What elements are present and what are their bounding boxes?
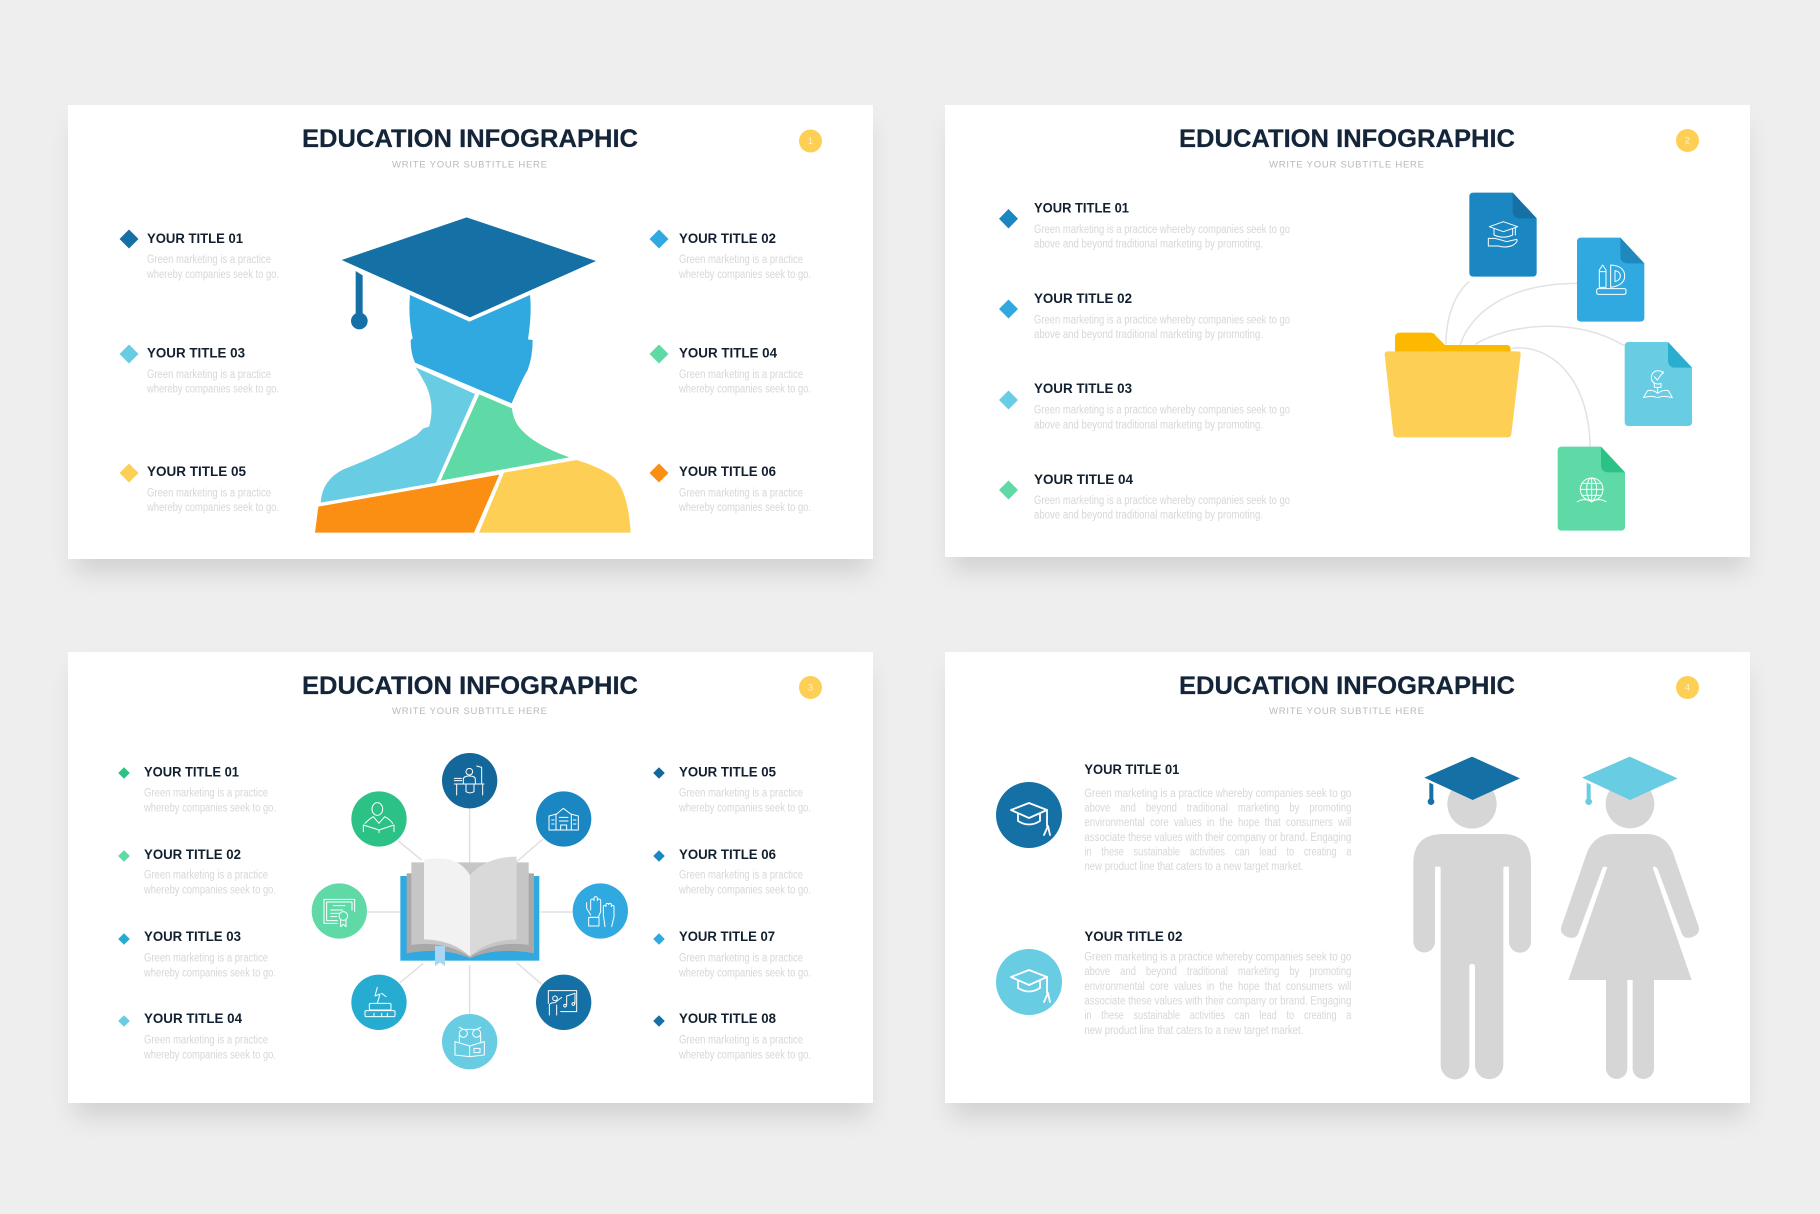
page number badge: 1 [808, 136, 813, 146]
item: title 06 [653, 847, 811, 896]
node: owl reading book [442, 1014, 497, 1069]
item: title 04: Green marketing is a practice [144, 1034, 268, 1046]
node: raised hands [573, 883, 628, 939]
item: title 02 [999, 291, 1290, 341]
item: title 02 [650, 230, 811, 281]
item: title 04: whereby companies seek to go. [678, 384, 811, 396]
item: title 07: YOUR TITLE 07 [679, 929, 775, 944]
item: title 06: whereby companies seek to go. [678, 502, 811, 514]
item: title 02: whereby companies seek to go. [143, 884, 276, 896]
item: title 05: whereby companies seek to go. [146, 502, 279, 514]
left neck segment [321, 367, 475, 503]
subtitle: WRITE YOUR SUBTITLE HERE [1269, 160, 1424, 170]
item: title 06: YOUR TITLE 06 [679, 464, 776, 479]
item: title 07: Green marketing is a practice [679, 952, 803, 964]
subtitle: WRITE YOUR SUBTITLE HERE [392, 706, 547, 717]
item: title 01 [999, 201, 1290, 251]
item: title 08: Green marketing is a practice [679, 1034, 803, 1046]
subtitle: WRITE YOUR SUBTITLE HERE [1269, 706, 1424, 717]
item: title 01: Green marketing is a practice whereby companies seek to go [1034, 224, 1290, 236]
folder front [1385, 351, 1521, 437]
item: title 02: Green marketing is a practice [144, 870, 268, 882]
text block: title 02: environmental core values in the hope that consumers will [1084, 981, 1351, 993]
item: title 03: YOUR TITLE 03 [144, 929, 241, 944]
item: title 06: Green marketing is a practice [679, 870, 803, 882]
text block: title 02: Green marketing is a practice whereby companies seek to go [1084, 952, 1351, 964]
text block: title 01 [1084, 762, 1352, 873]
text block: title 02: associate these values with their company or brand. Engaging [1084, 996, 1351, 1008]
node: student at desk [442, 753, 497, 808]
item: title 02: YOUR TITLE 02 [144, 847, 241, 862]
text block: title 01: Green marketing is a practice whereby companies seek to go [1084, 788, 1351, 800]
text block: title 01: in these sustainable activities can lead to creating a [1084, 846, 1352, 858]
title: EDUCATION INFOGRAPHIC [1179, 672, 1515, 700]
book hub diagram [312, 753, 628, 1069]
item: title 05: YOUR TITLE 05 [679, 765, 776, 780]
text block: title 01: new product line that caters to a new target market. [1084, 861, 1303, 873]
item: title 05 [653, 765, 811, 814]
item: title 06: Green marketing is a practice [679, 488, 803, 500]
item: title 02: Green marketing is a practice whereby companies seek to go [1034, 314, 1290, 326]
page number badge [799, 130, 822, 152]
item: title 05: Green marketing is a practice [679, 788, 803, 800]
panel: slide 2 folder and files [945, 105, 1750, 557]
text block: title 02 [1084, 929, 1352, 1037]
item: title 03: whereby companies seek to go. [146, 384, 279, 396]
item: title 03: YOUR TITLE 03 [147, 346, 245, 360]
folder diagram [1385, 193, 1692, 531]
item: title 04: above and beyond traditional marketing by promoting. [1034, 510, 1263, 522]
right neck segment [441, 394, 569, 481]
file 3 with lightbulb and book icon [1625, 342, 1692, 426]
item: title 03 [999, 381, 1290, 432]
item: title 02: whereby companies seek to go. [678, 269, 811, 281]
item: title 05 [120, 464, 279, 514]
file 2 with ruler and pencil icon [1577, 238, 1644, 322]
item: title 07: whereby companies seek to go. [678, 968, 811, 980]
icon: graduation cap light [996, 949, 1062, 1015]
item: title 01 [118, 765, 276, 814]
item: title 01: YOUR TITLE 01 [147, 231, 243, 246]
yellow shoulder segment [479, 460, 631, 533]
node: student reading [351, 791, 407, 847]
female figure [1561, 757, 1699, 1079]
text block: title 01: YOUR TITLE 01 [1084, 762, 1180, 777]
text block: title 01: environmental core values in the hope that consumers will [1084, 817, 1351, 829]
mortarboard cap [342, 217, 596, 329]
item: title 03: YOUR TITLE 03 [1034, 381, 1132, 396]
file 1 with graduation cap icon [1469, 193, 1537, 277]
item: title 02: YOUR TITLE 02 [1034, 291, 1132, 306]
graduate silhouette [315, 217, 631, 533]
head segment [409, 295, 533, 403]
item: title 04 [118, 1011, 276, 1062]
item: title 04: YOUR TITLE 04 [1034, 472, 1133, 487]
page number badge [1676, 129, 1699, 152]
item: title 01: whereby companies seek to go. [143, 802, 276, 814]
item: title 05: Green marketing is a practice [147, 488, 271, 500]
connector curves [1446, 282, 1624, 447]
page number badge [799, 676, 822, 699]
item: title 06: YOUR TITLE 06 [679, 847, 776, 862]
subtitle: WRITE YOUR SUBTITLE HERE [392, 160, 547, 170]
spokes [368, 808, 572, 1014]
item: title 01: whereby companies seek to go. [146, 269, 279, 281]
item: title 06 [650, 464, 811, 514]
item: title 03: above and beyond traditional marketing by promoting. [1034, 420, 1263, 432]
item: title 03 [118, 929, 276, 980]
item: title 06: whereby companies seek to go. [678, 884, 811, 896]
text block: title 02: YOUR TITLE 02 [1084, 929, 1182, 944]
item: title 04 [650, 344, 811, 396]
panel: slide 1 graduate silhouette [68, 105, 873, 559]
item: title 03: Green marketing is a practice [147, 369, 271, 381]
item: title 03 [120, 344, 279, 396]
item: title 02: YOUR TITLE 02 [679, 231, 776, 246]
item: title 01: above and beyond traditional marketing by promoting. [1034, 239, 1263, 251]
item: title 04: YOUR TITLE 04 [144, 1011, 242, 1026]
item: title 01: YOUR TITLE 01 [144, 765, 239, 780]
item: title 05: whereby companies seek to go. [678, 802, 811, 814]
icon: graduation cap dark [996, 782, 1062, 848]
male figure [1413, 757, 1531, 1079]
title: EDUCATION INFOGRAPHIC [302, 672, 638, 700]
item: title 02: Green marketing is a practice [679, 254, 803, 266]
item: title 04: Green marketing is a practice [679, 369, 803, 381]
item: title 04 [999, 472, 1290, 522]
item: title 04: Green marketing is a practice whereby companies seek to go [1034, 495, 1290, 507]
text block: title 01: above and beyond traditional marketing by promoting [1084, 802, 1351, 814]
item: title 03: Green marketing is a practice [144, 952, 268, 964]
node: school building [536, 791, 591, 847]
item: title 01: YOUR TITLE 01 [1034, 201, 1129, 216]
orange chest segment [315, 475, 499, 533]
figures [1413, 757, 1699, 1079]
page number badge: 4 [1685, 682, 1690, 692]
item: title 02 [118, 847, 276, 896]
node: certificate [312, 883, 367, 939]
page number badge: 3 [808, 682, 813, 692]
node: music teacher board [536, 975, 591, 1030]
item: title 01: Green marketing is a practice [144, 788, 268, 800]
node: stacked books with spark [351, 975, 407, 1030]
item: title 01: Green marketing is a practice [147, 254, 271, 266]
item: title 07 [653, 929, 811, 980]
item: title 03: Green marketing is a practice whereby companies seek to go [1034, 405, 1290, 417]
item: title 08: whereby companies seek to go. [678, 1050, 811, 1062]
folder back [1395, 333, 1511, 355]
item: title 04: whereby companies seek to go. [143, 1050, 276, 1062]
item: title 05: YOUR TITLE 05 [147, 464, 246, 479]
panel: slide 4 male and female graduates [945, 652, 1750, 1103]
panel: slide 3 open book hub [68, 652, 873, 1103]
item: title 08: YOUR TITLE 08 [679, 1011, 776, 1026]
text block: title 02: new product line that caters to a new target market. [1084, 1025, 1303, 1037]
title: EDUCATION INFOGRAPHIC [1179, 125, 1515, 153]
open book [400, 857, 539, 966]
page number badge: 2 [1685, 136, 1690, 146]
text block: title 02: in these sustainable activities can lead to creating a [1084, 1010, 1352, 1022]
page number badge [1676, 676, 1699, 699]
item: title 01 [120, 230, 279, 281]
file 4 with globe and book icon [1558, 447, 1625, 531]
text block: title 02: above and beyond traditional marketing by promoting [1084, 966, 1351, 978]
text block: title 01: associate these values with their company or brand. Engaging [1084, 832, 1351, 844]
title: EDUCATION INFOGRAPHIC [302, 125, 638, 153]
item: title 04: YOUR TITLE 04 [679, 346, 777, 360]
item: title 03: whereby companies seek to go. [143, 968, 276, 980]
item: title 02: above and beyond traditional marketing by promoting. [1034, 329, 1263, 341]
item: title 08 [653, 1011, 811, 1062]
